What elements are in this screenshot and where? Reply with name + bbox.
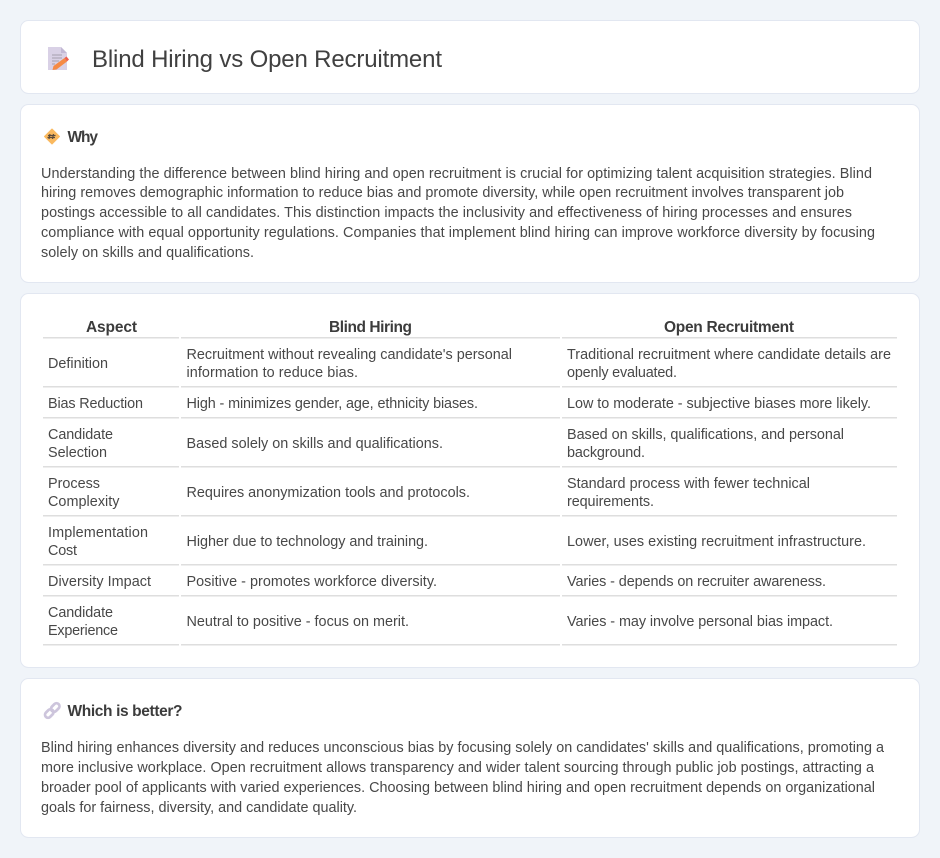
row: candidate experience: [43, 605, 897, 646]
text block: verdict: goals for fairness, diversity, and candidate quality.: [41, 800, 357, 816]
row: implementation cost: Higher due to technology and training.: [186, 534, 428, 550]
row: definition: Definition: [48, 356, 108, 372]
row: bias reduction: [43, 396, 897, 418]
row: candidate selection: Candidate: [48, 427, 113, 443]
row: implementation cost: [43, 525, 897, 566]
panel: which is better: [20, 678, 920, 838]
icon: warning diamond: [44, 129, 60, 144]
row: definition: openly evaluated.: [567, 365, 677, 381]
row: candidate experience: Neutral to positive - focus on merit.: [186, 614, 409, 630]
row: bias reduction: Bias Reduction: [48, 396, 143, 412]
row: implementation cost: Cost: [48, 543, 77, 559]
row: process complexity: requirements.: [567, 494, 654, 510]
icon: document with pencil: [48, 47, 69, 70]
text block: why explanation: hiring removes demographic information to reduce bias and promote diversity, while open recruitment involves transparent job: [41, 185, 844, 201]
row: bias reduction: Low to moderate - subjective biases more likely.: [567, 396, 871, 412]
row: candidate experience: Experience: [48, 623, 118, 639]
text block: why explanation: [41, 166, 875, 261]
row: candidate selection: background.: [567, 445, 645, 461]
row: diversity impact: [43, 574, 897, 596]
row: definition: information to reduce bias.: [186, 365, 358, 381]
text block: verdict: broader pool of applicants with varied experiences. Choosing between blind hiring and open recruitment depends on organizational: [41, 780, 875, 796]
row: bias reduction: High - minimizes gender, age, ethnicity biases.: [186, 396, 478, 412]
text block: why explanation: postings accessible to all candidates. This distinction impacts the inclusivity and effectiveness of hiring processes and ensures: [41, 205, 852, 221]
row: candidate experience: Candidate: [48, 605, 113, 621]
row: definition: Recruitment without revealing candidate's personal: [186, 347, 512, 363]
panel: comparison table: [20, 294, 920, 668]
row: diversity impact: Varies - depends on recruiter awareness.: [567, 574, 826, 590]
row: candidate selection: Based solely on skills and qualifications.: [186, 436, 443, 452]
row: implementation cost: Implementation: [48, 525, 148, 541]
row: process complexity: Standard process with fewer technical: [567, 476, 810, 492]
text block: verdict: Blind hiring enhances diversity and reduces unconscious bias by focusing solely on candidates' skills and qualifications, promoting a: [41, 740, 884, 756]
icon: chain link: [44, 702, 61, 719]
row: candidate selection: [43, 427, 897, 468]
row: process complexity: Complexity: [48, 494, 120, 510]
table header row: Blind Hiring: [329, 319, 412, 336]
row: process complexity: Requires anonymization tools and protocols.: [186, 485, 470, 501]
panel: title: [20, 20, 920, 94]
heading: which is better: Which is better?: [68, 703, 182, 720]
table header row: Open Recruitment: [664, 319, 794, 336]
text block: verdict: more inclusive workplace. Open recruitment allows transparency and wider talent sourcing through public job postings, attracting a: [41, 760, 874, 776]
text block: verdict: [41, 740, 884, 816]
table header row: [43, 319, 897, 338]
row: implementation cost: Lower, uses existing recruitment infrastructure.: [567, 534, 866, 550]
row: candidate experience: Varies - may involve personal bias impact.: [567, 614, 833, 630]
title text: Blind Hiring vs Open Recruitment: [92, 46, 442, 73]
row: diversity impact: Diversity Impact: [48, 574, 151, 590]
text block: why explanation: solely on skills and qualifications.: [41, 245, 254, 261]
row: process complexity: Process: [48, 476, 100, 492]
text block: why explanation: Understanding the difference between blind hiring and open recruitment is crucial for optimizing talent acquisition strategies. Blind: [41, 166, 872, 182]
row: candidate selection: Selection: [48, 445, 107, 461]
row: definition: [43, 347, 897, 388]
panel: why: [20, 104, 920, 282]
row: candidate selection: Based on skills, qualifications, and personal: [567, 427, 844, 443]
table header row: Aspect: [86, 319, 137, 336]
row: diversity impact: Positive - promotes workforce diversity.: [186, 574, 437, 590]
text block: why explanation: compliance with equal opportunity regulations. Companies that implement blind hiring can improve workforce diversity by focusing: [41, 225, 875, 241]
row: definition: Traditional recruitment where candidate details are: [567, 347, 891, 363]
row: process complexity: [43, 476, 897, 516]
heading: why: Why: [68, 129, 98, 146]
